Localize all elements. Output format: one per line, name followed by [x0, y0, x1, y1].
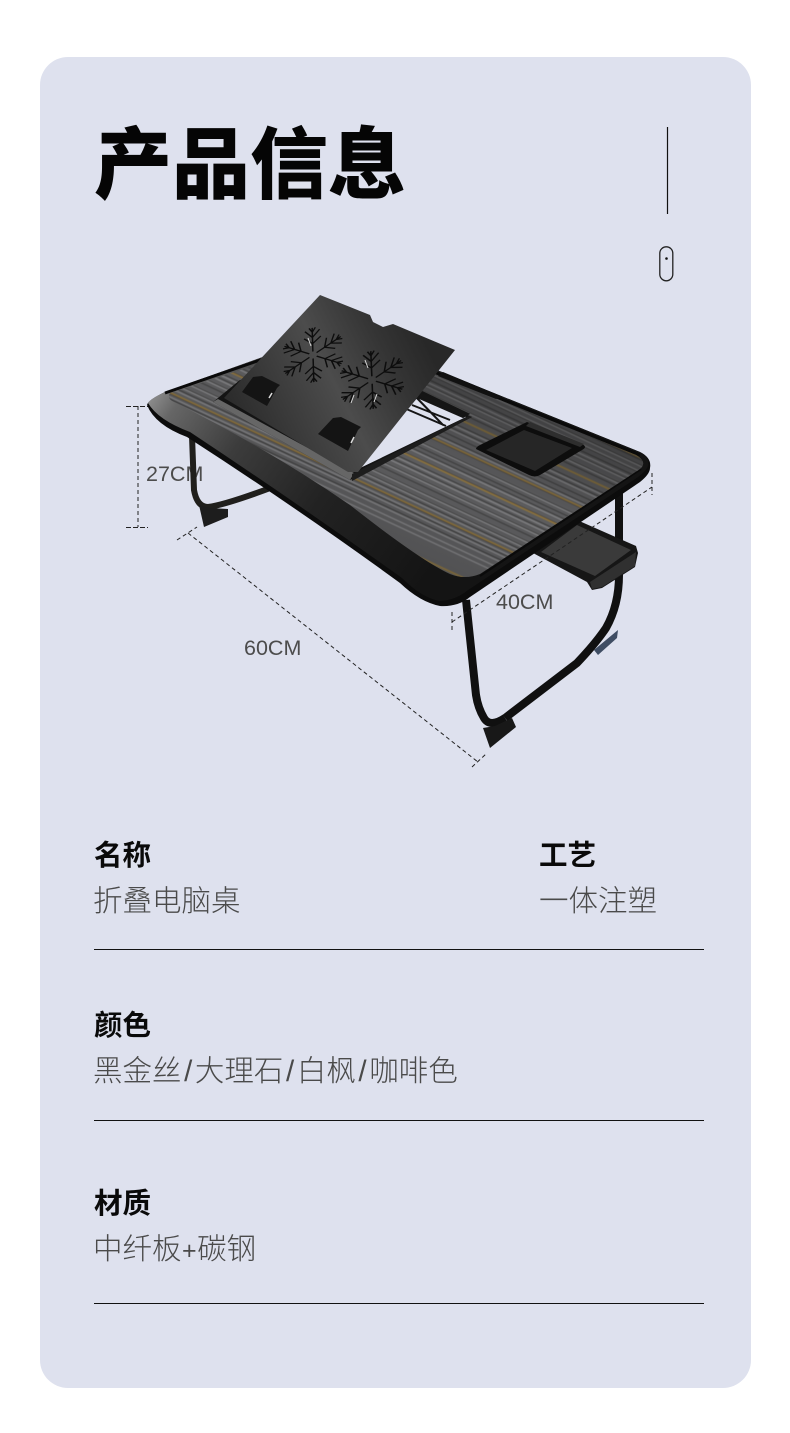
- dimension: width 40CM: 40CM: [496, 590, 553, 614]
- stand opening with struts: [213, 370, 472, 481]
- title: 产品信息: [94, 121, 406, 209]
- side drawer: [533, 520, 638, 590]
- value: colour: 黑金丝/大理石/白枫/咖啡色: [93, 1055, 458, 1088]
- label: material: 材质: [94, 1188, 151, 1220]
- slot: [438, 372, 503, 399]
- label: colour: 颜色: [94, 1010, 151, 1042]
- dimension: height 27CM: [126, 406, 203, 528]
- snowflake vents left: [269, 320, 357, 390]
- value: craft: 一体注塑: [539, 885, 657, 918]
- tray recess: [476, 422, 585, 476]
- laptop stand panel: [224, 295, 455, 472]
- right front leg: [466, 490, 619, 748]
- snowflake vents right: [326, 343, 418, 417]
- clip right: [318, 417, 361, 451]
- clip left: [242, 376, 280, 406]
- product illustration: folding laptop desk with dimensions: [126, 127, 674, 768]
- label: craft: 工艺: [539, 840, 596, 872]
- dimension: length 60CM: [177, 527, 487, 767]
- value: name: 折叠电脑桌: [93, 885, 241, 918]
- left rear leg: [192, 436, 273, 527]
- dimension: width 40CM: [452, 473, 652, 632]
- label: name: 名称: [94, 840, 151, 872]
- wood grain surface: [169, 366, 644, 577]
- icon: scroll pill: [660, 247, 673, 281]
- dimension: height 27CM: 27CM: [146, 462, 203, 486]
- value: material: 中纤板+碳钢: [93, 1233, 256, 1266]
- decorative vertical rule: [666, 127, 668, 214]
- desk top: [147, 357, 650, 606]
- dimension: length 60CM: 60CM: [244, 636, 301, 660]
- vent highlights: [308, 338, 377, 403]
